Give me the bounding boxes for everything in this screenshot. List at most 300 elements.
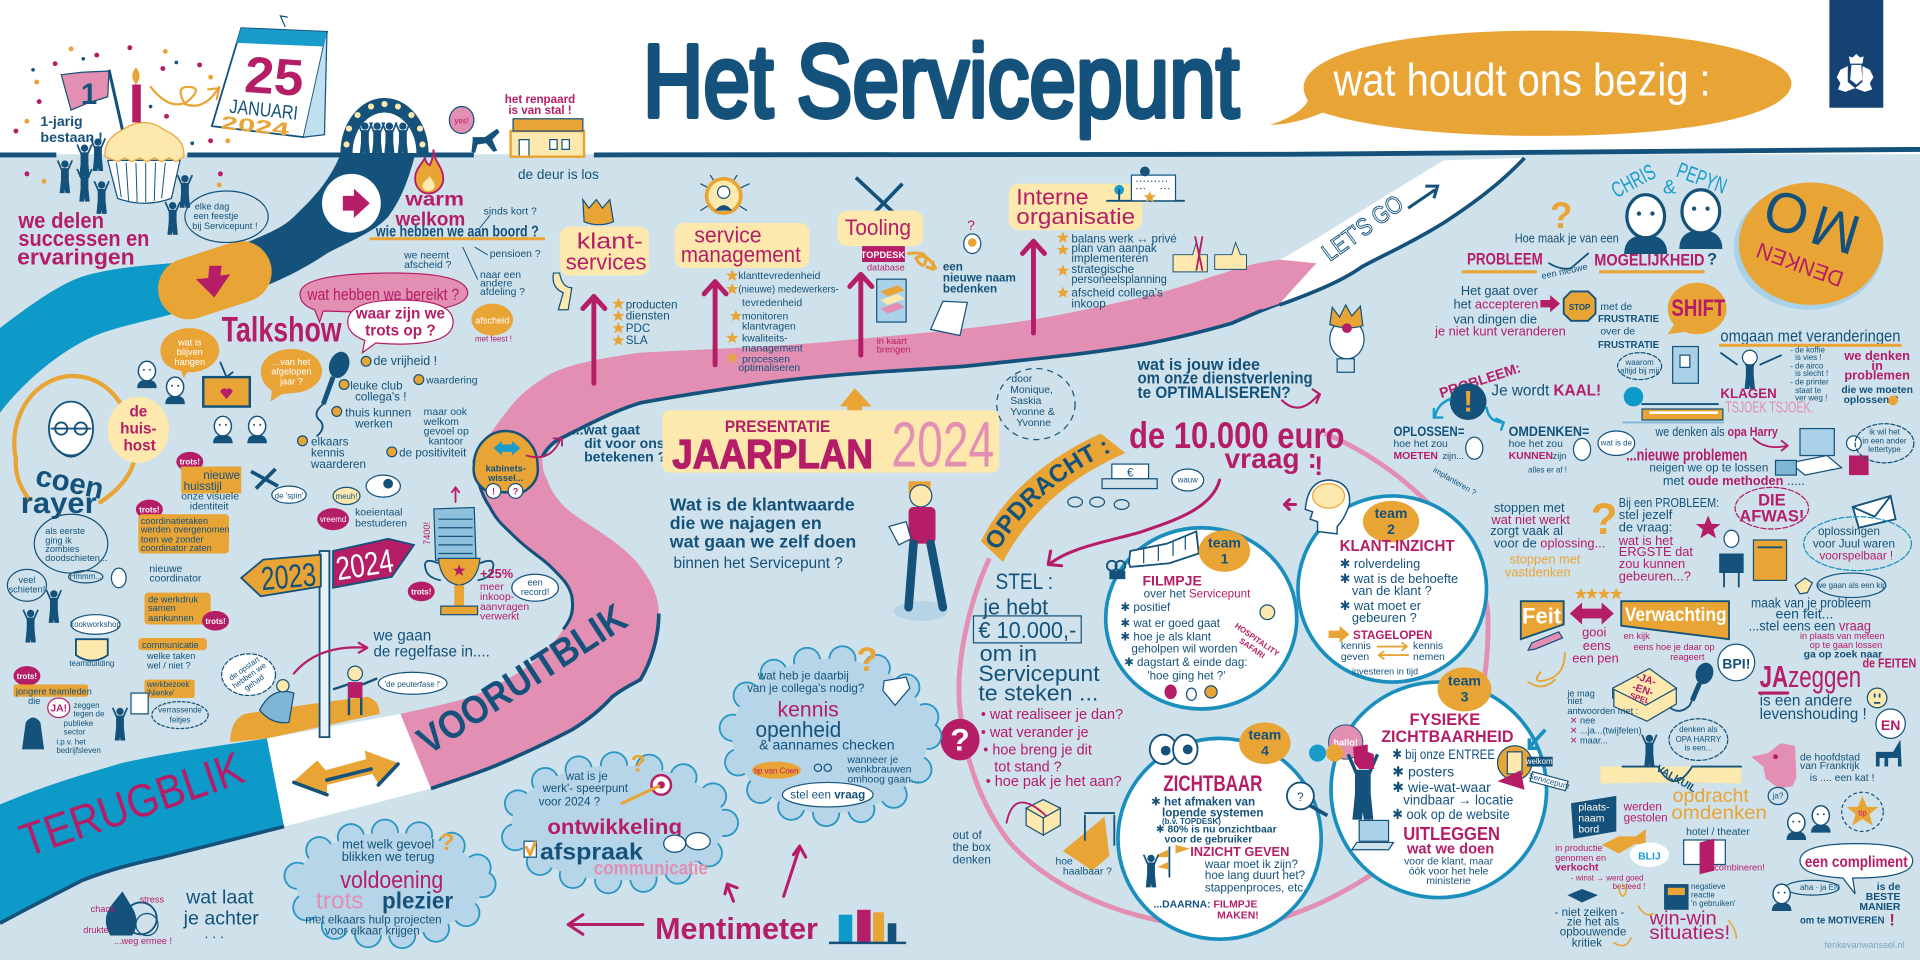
section: trots notes	[7, 500, 230, 755]
section: trots notes: schieten!	[9, 585, 45, 595]
list: SLA	[626, 334, 648, 347]
section: stoppen met wat niet werkt	[1490, 487, 1911, 598]
panel: team 3: óók voor het hele	[1409, 866, 1489, 877]
label: in kaart brengen: brengen	[877, 345, 910, 355]
section: trots notes: teambuilding	[69, 659, 114, 668]
section: omgaan met veranderingen: oplossen ?	[1844, 395, 1898, 406]
panel: team 1: Servicepunt	[1189, 588, 1251, 601]
tag: team 1	[1199, 530, 1250, 572]
panel: team 1: ✱ wat er goed gaat	[1120, 617, 1221, 630]
section: probleem mogelijkheid: accepteren	[1475, 297, 1538, 312]
list: diensten	[626, 310, 670, 323]
arrow: swirl	[909, 253, 936, 269]
section: feit verwachting: nee	[1580, 716, 1595, 726]
list: balans werk ↔ privé	[1071, 232, 1177, 245]
bubble: stel een vraag	[782, 782, 873, 807]
speech bubble: wat houdt ons bezig	[1270, 31, 1791, 136]
dashed circle: door Monique: Monique,	[1010, 385, 1053, 396]
panel: team 1: ✱ hoe je als klant	[1120, 630, 1212, 643]
list: wat ging goed: thuis kunnen	[345, 406, 411, 419]
panel: team 4: MAKEN!	[1217, 910, 1259, 921]
icon: computer	[1776, 429, 1869, 475]
bubble: een compliment: een compliment	[1805, 854, 1908, 871]
icon: question circle	[940, 719, 980, 760]
section: probleem kaal: Je wordt KAAL!	[1491, 383, 1601, 400]
section: chris and pepyn: PEPYN	[1673, 158, 1730, 199]
portrait: coen rayer: coen	[33, 459, 107, 506]
panel: team 4	[1118, 722, 1374, 939]
icon: calendar: 2024	[220, 112, 292, 140]
icon: paper dolls	[1173, 236, 1247, 272]
tag: team 2: team	[1375, 505, 1407, 521]
icon: knot of chaos	[83, 891, 172, 946]
label: interne organisatie	[1009, 184, 1142, 230]
bubble: peuterfase: 'de peuterfase !'	[385, 680, 441, 689]
section: plaatsnaambord: gestolen	[1624, 812, 1668, 825]
tag: team 1: team	[1208, 534, 1241, 550]
arrow: mentimeter left	[568, 915, 643, 934]
band: let's go: LET'S GO	[1317, 190, 1409, 267]
section: omgaan met veranderingen: problemen	[1844, 368, 1910, 383]
icon: crown	[583, 200, 613, 225]
icon: trophy and paper stack: 7400!	[422, 522, 432, 545]
section: probleem kaal: zijn	[1553, 451, 1566, 461]
section: trots notes: i.p.v. het	[56, 737, 87, 746]
section: maak van je probleem een feit: een feit...	[1776, 605, 1833, 621]
panel: team 1: geholpen wil worden	[1131, 643, 1237, 656]
section: plaatsnaambord: win-win	[1648, 907, 1717, 929]
heading: we delen successen en ervaringen: successen en	[18, 226, 149, 251]
panel: team 4: ✱ het afmaken van	[1151, 796, 1255, 809]
panel: team 4: ZICHTBAAR	[1163, 771, 1263, 796]
section: probleem kaal: hoe het zou	[1509, 439, 1563, 450]
label: wat gaat dit voor ons betekenen: betekenen ?	[584, 449, 666, 465]
section: trots notes: toen we zonder	[141, 534, 204, 544]
icon: cupcake	[105, 67, 184, 203]
cloud: opa harry: is een...	[1684, 744, 1712, 753]
icon: envelope	[1853, 496, 1896, 528]
section: maak van je probleem een feit: in plaats van meteen	[1800, 631, 1885, 641]
speech: elke dag een feestje	[185, 191, 268, 242]
icon: complaining person	[1720, 350, 1782, 388]
jaarplan presentation banner	[662, 388, 999, 481]
bubble: EN	[1876, 709, 1905, 738]
header divider line	[0, 149, 1920, 155]
bubble: blij	[1630, 842, 1669, 867]
bubble: BPI: BPI!	[1722, 656, 1750, 672]
section: trots notes: verrassende	[158, 706, 202, 715]
icon: knot of chaos: ...weg ermee !	[114, 936, 172, 946]
section: maak van je probleem een feit: is .... een kat !	[1810, 773, 1874, 784]
label: klant-services: klant-	[577, 229, 643, 254]
icon: road to finish	[1063, 813, 1114, 871]
section: maak van je probleem een feit: levenshouding !	[1760, 706, 1867, 723]
cloud: kennis openheid: & aannames checken	[759, 736, 895, 752]
bubble: kip zonder kop	[1795, 573, 1887, 598]
big pink arc	[959, 433, 1488, 927]
section: probleem mogelijkheid: een nieuwe	[1540, 262, 1588, 281]
logo: Rijksoverheid	[1829, 0, 1883, 108]
section: warm welkom	[371, 149, 544, 344]
section: trots notes: sector	[64, 728, 86, 737]
panel: team 3: UITLEGGEN	[1403, 823, 1500, 844]
label: out of the box denken: out of	[953, 829, 983, 842]
icon: toddler	[333, 666, 377, 715]
section: probleem kaal: zijn...	[1442, 451, 1464, 461]
label: nieuwe naam bedenken: een	[943, 261, 963, 274]
bubble: waar zijn we trots op: trots op ?	[365, 323, 436, 340]
bubble: kabinetswissel: wissel...	[487, 473, 523, 483]
label: meer inkoop aanvragen	[408, 566, 558, 623]
icon: house with open door	[511, 119, 584, 157]
section: plaatsnaambord	[1554, 796, 1765, 950]
section: om denken: M	[1804, 193, 1867, 267]
section: stoppen met wat niet werkt: stoppen met	[1510, 551, 1581, 566]
label: out of the box denken: the box	[953, 841, 991, 854]
river: terugblik to warm welkom (upper band)	[0, 154, 415, 413]
section: plaatsnaambord: werden	[1623, 801, 1662, 814]
icon: knot of chaos: chaos	[91, 904, 116, 914]
label: meer inkoop aanvragen: record!	[521, 587, 549, 597]
sign: 2023: 2023	[260, 557, 318, 598]
section: plaatsnaambord: zie het als	[1567, 916, 1619, 929]
section: talkshow	[137, 273, 478, 471]
section: lightbulb idea: om onze dienstverlening	[1138, 368, 1313, 387]
section: chris and pepyn: CHRIS	[1607, 159, 1660, 203]
list: monitoren	[742, 312, 788, 323]
section: stoppen met wat niet werkt: gebeuren...?	[1619, 568, 1691, 583]
panel: team 2: kennis	[1341, 641, 1371, 652]
badge: afscheid met feest	[471, 304, 513, 344]
section: trots notes: die	[28, 696, 40, 706]
cloud: voldoening: trots	[316, 888, 364, 915]
cloud: voldoening: blikken we terug	[342, 849, 435, 864]
list: strategische	[1071, 263, 1134, 276]
icon: calendar: JANUARI	[228, 96, 299, 125]
list: questions: • wat realiseer je dan?	[981, 707, 1123, 723]
section: probleem kaal	[1393, 359, 1635, 498]
cloud: voldoening: met elkaars hulp projecten	[305, 913, 442, 926]
text: stel: je hebt	[982, 595, 1048, 620]
cloud: die afwas: DIE	[1758, 491, 1786, 510]
section: probleem mogelijkheid: ?	[1707, 249, 1717, 268]
label: meer inkoop aanvragen: een	[527, 577, 543, 587]
section: huisstijl and cow: onze visuele	[181, 492, 239, 503]
panel: team 2: ✱ wat moet er	[1340, 598, 1422, 613]
icon: knot of chaos: stress	[140, 894, 164, 904]
section: huisstijl and cow: bestuderen	[355, 519, 407, 530]
title: Het Servicepunt	[643, 23, 1239, 138]
icon: signpost person	[1144, 845, 1190, 887]
heading: we delen successen en ervaringen: ervaringen	[17, 244, 135, 269]
icon: hospitality safari	[1228, 605, 1281, 667]
bubble: EN: EN	[1881, 717, 1900, 733]
section: probleem mogelijkheid: van dingen die	[1453, 311, 1537, 326]
icon: layered papers	[877, 279, 906, 322]
cloud: kennis openheid: wenkbrauwen	[846, 765, 912, 776]
label: tooling: Tooling	[845, 215, 911, 240]
section: plaatsnaambord: kritiek	[1572, 937, 1602, 950]
white circle with right arrow	[322, 174, 381, 233]
cloud: ontwikkeling: ontwikkeling	[547, 816, 682, 839]
label: nieuwe naam bedenken: bedenken	[943, 283, 997, 296]
section: stoppen met wat niet werkt: zorgt vaak al	[1490, 523, 1563, 538]
panel: team 3: ✱ posters	[1392, 763, 1454, 779]
section: huisstijl and cow: identiteit	[190, 501, 229, 512]
panel: team 3: wat we doen	[1406, 841, 1494, 857]
icon: hand	[553, 273, 572, 310]
section: om denken: O	[1756, 176, 1817, 250]
section: probleem kaal: PROBLEEM:	[1437, 359, 1523, 401]
icon: france map	[1751, 743, 1796, 789]
panel: team 4: (b.v. TOPDESK)	[1162, 817, 1221, 826]
column: klantservices	[553, 200, 677, 383]
list: implementeren	[1071, 252, 1148, 265]
section: feit verwachting: reageert	[1670, 652, 1705, 662]
section: probleem kaal: hoe het zou	[1393, 439, 1448, 450]
section: chris and pepyn: &	[1663, 176, 1676, 198]
cloud: ander lettertype	[1855, 424, 1914, 463]
tag: team 4: team	[1248, 727, 1281, 743]
section: trots notes: nieuwe	[149, 564, 183, 575]
section: plaatsnaambord: besteed !	[1613, 882, 1645, 891]
cloud: ontwikkeling: werk'- speerpunt	[541, 782, 629, 795]
section: trots notes: Hmmm...	[70, 572, 102, 581]
label: wat laat je achter: wat laat	[185, 887, 254, 909]
section: maak van je probleem een feit: is een andere	[1760, 692, 1852, 709]
tag: team 1: 1	[1221, 550, 1229, 566]
panel: team 3: vindbaar → locatie	[1403, 791, 1514, 807]
section: maak van je probleem een feit: op te gaan lossen	[1810, 640, 1882, 650]
list: wat ging goed: waarderen	[310, 458, 366, 471]
badge: afscheid met feest: afscheid	[475, 315, 509, 325]
bubble: tip van coen	[752, 762, 801, 779]
icon: stop sign: STOP	[1569, 303, 1591, 312]
label: in kaart brengen: in kaart	[877, 336, 907, 346]
section: trots notes: welke taken	[146, 651, 195, 661]
text: stel: Servicepunt	[978, 661, 1100, 686]
icon: lightbulb: ?	[967, 217, 975, 233]
list: wat ging goed: welkom	[423, 417, 459, 428]
section: omgaan met veranderingen: we denken als opa Harry	[1655, 424, 1779, 439]
section: trots notes: samen	[148, 603, 176, 613]
section: een compliment: MANIER	[1859, 902, 1901, 913]
label: service management: service	[694, 222, 762, 247]
cloud: waarom altijd bij mij	[1618, 353, 1662, 380]
panel: team 3: FYSIEKE	[1410, 710, 1480, 729]
panel: team 3: voor de klant, maar	[1404, 856, 1494, 867]
dashed circle: door Monique	[997, 369, 1075, 440]
panel: team 4: voor de gebruiker	[1164, 834, 1252, 845]
panel: team 4: hoe lang duurt het?	[1205, 869, 1306, 882]
section: trots notes: aankunnen	[148, 613, 194, 623]
list: wat ging goed: elkaars	[311, 436, 349, 449]
section: probleem kaal: MOETEN	[1393, 451, 1438, 462]
label: het renpaard is van stal: het renpaard	[505, 93, 575, 106]
icon: bulb with crown	[1330, 305, 1364, 372]
panel: team 2: van de klant ?	[1352, 583, 1432, 598]
section: omgaan met veranderingen: ...nieuwe problemen	[1626, 445, 1747, 464]
icon: target	[622, 775, 671, 803]
section: plaatsnaambord: combineren!	[1714, 863, 1765, 873]
cloud: oplossingen	[1804, 517, 1911, 571]
icon: star	[1696, 516, 1720, 538]
section: omgaan met veranderingen: staat te	[1795, 386, 1822, 395]
section: omgaan met veranderingen: KLAGEN	[1720, 385, 1777, 401]
section: stoppen met wat niet werkt: Bij een PROBLEEM:	[1619, 495, 1719, 510]
section: chris and pepyn: ?	[1550, 195, 1572, 236]
section: probleem mogelijkheid: het	[1453, 297, 1475, 312]
icon: microphone	[1670, 660, 1716, 711]
icon: compass person	[700, 175, 749, 213]
section: omgaan met veranderingen: die we moeten	[1841, 385, 1913, 396]
bubble: kabinetswissel: ?	[513, 487, 519, 497]
cloud: kennis openheid: van je collega's nodig?	[747, 682, 865, 695]
icon: stop sign	[1564, 291, 1596, 321]
label: interne organisatie: organisatie	[1016, 204, 1135, 229]
bubble: tip van coen: tip van Coen	[754, 766, 799, 775]
list: afscheid collega's	[1071, 286, 1163, 299]
bubble: wat is blijven hangen	[160, 328, 219, 378]
panel: team 4: FILMPJE	[1214, 899, 1257, 910]
heading: talkshow: Talkshow	[222, 310, 342, 350]
label: meer inkoop aanvragen: verwerkt	[480, 612, 519, 623]
icon: train	[1622, 387, 1724, 422]
label: wat gaat dit voor ons betekenen: ...wat gaat	[572, 422, 640, 438]
icon: heads with tip star: tip	[1858, 809, 1867, 818]
panel: team 4: INZICHT GEVEN	[1190, 844, 1289, 859]
section: omgaan met veranderingen: - de koffie	[1790, 346, 1826, 355]
section: probleem kaal: wat is de	[1600, 439, 1633, 448]
speech: elke dag een feestje: een feestje	[193, 211, 238, 221]
list: questions: • hoe pak je het aan?	[986, 774, 1122, 790]
section: chris and pepyn	[1550, 158, 1730, 254]
cloud: opa harry: OPA HARRY	[1676, 735, 1722, 744]
section: trots notes: werden overgenomen	[140, 525, 230, 535]
section: probleem mogelijkheid: PROBLEEM	[1467, 249, 1543, 268]
label: meer inkoop aanvragen: +25%	[480, 566, 514, 581]
section: omgaan met veranderingen: - de airco	[1790, 362, 1824, 371]
list: wat ging goed: gevoel op	[424, 427, 469, 438]
label: meer inkoop aanvragen: meer	[480, 582, 504, 593]
panel: team 4: lopende systemen	[1162, 807, 1263, 820]
list: wat ging goed: collega's !	[355, 390, 406, 403]
section: feit verwachting: eens	[1583, 638, 1611, 653]
section: lightbulb idea: wat is jouw idee	[1137, 355, 1260, 374]
section: maak van je probleem een feit: ...stel eens een vraag	[1749, 618, 1874, 634]
sign: 2023	[241, 555, 321, 598]
icon: baby	[260, 680, 294, 723]
bubble: van het afgelopen jaar	[261, 349, 322, 402]
label: interne organisatie: Interne	[1016, 184, 1089, 209]
section: feit verwachting: opdracht	[1673, 785, 1749, 807]
label: hoe haalbaar: haalbaar ?	[1063, 866, 1112, 877]
column: interne organisatie	[1009, 167, 1247, 333]
cloud: ontwikkeling: afspraak	[540, 839, 643, 865]
panel: team 2: ✱ rolverdeling	[1340, 556, 1420, 571]
section: omgaan met veranderingen: we denken	[1843, 348, 1910, 363]
panel: team 3: ✱ ook op de website	[1392, 806, 1510, 822]
icon: money	[1068, 464, 1204, 509]
panel: team 4: stappenproces, etc.	[1205, 881, 1306, 894]
cloud: waarom altijd bij mij: waarom	[1624, 358, 1654, 367]
column: tooling	[838, 178, 1016, 355]
dashed circle: door Monique: door	[1011, 374, 1033, 385]
section: feit verwachting: ✕	[1570, 735, 1580, 745]
panel: team 1: ✱ dagstart & einde dag:	[1124, 656, 1248, 669]
section: probleem mogelijkheid: Hoe maak je van een	[1515, 230, 1619, 245]
panel: team 1	[1106, 528, 1297, 709]
icon: book	[1664, 884, 1689, 910]
heading: de 10.000 euro vraag: de 10.000 euro	[1129, 415, 1344, 456]
bubble: waar zijn we trots op	[348, 300, 453, 353]
icon: pencil	[1528, 632, 1565, 686]
cloud: ontwikkeling	[512, 750, 725, 880]
panel: team 3: ✱ wie-wat-waar	[1392, 779, 1491, 795]
section: omgaan met veranderingen: in	[1871, 358, 1883, 373]
cloud: de opstart	[222, 653, 276, 698]
arrow up	[1022, 241, 1044, 333]
label: de deur is los: de deur is los	[518, 166, 599, 182]
section: lightbulb idea	[1137, 305, 1364, 408]
icon: welcome arch	[340, 98, 429, 154]
jaarplan presentation banner: JAARPLAN	[672, 431, 873, 477]
list	[612, 298, 677, 347]
list: processen	[742, 354, 790, 365]
icon: building	[1107, 167, 1184, 202]
section: stoppen met wat niet werkt: oplossing...	[1540, 535, 1605, 550]
notes: sinds kort ?	[484, 206, 537, 217]
section: trots notes: jongere teamleden	[15, 686, 92, 696]
notes: afscheid ?	[404, 260, 452, 271]
heading: ja zeggen: JAzeggen	[1760, 660, 1861, 694]
section: huisstijl and cow	[176, 452, 407, 530]
section: trots notes: zeggen	[73, 701, 100, 710]
section: een compliment: !	[1889, 911, 1895, 930]
cloud: ontwikkeling: communicatie	[594, 857, 708, 879]
diagram: valkuil: VALKUIL	[1654, 764, 1698, 795]
band: terugblik	[0, 738, 284, 923]
section: om denken	[1734, 176, 1883, 310]
section: probleem mogelijkheid	[1434, 230, 1727, 351]
cloud: kennis openheid: omhoog gaan...	[847, 774, 920, 785]
icon: hello bubble	[1329, 725, 1363, 759]
cloud: voldoening	[296, 829, 482, 937]
bubble: wat hebben we bereikt	[300, 273, 468, 322]
section: omgaan met veranderingen	[1618, 327, 1914, 488]
tag: team 2: 2	[1387, 521, 1395, 537]
label: wat gaat dit voor ons betekenen: dit voor ons	[584, 435, 665, 451]
section: plaatsnaambord: hotel / theater	[1686, 827, 1750, 838]
icon: raised eyebrows	[814, 764, 831, 771]
list: wat ging goed: waardering	[425, 375, 478, 386]
heading: we delen successen en ervaringen: we delen	[17, 208, 104, 233]
text: stel: te steken ...	[978, 680, 1098, 705]
section: een compliment: aha · ja EN	[1800, 883, 1840, 892]
panel: team 1: over het	[1144, 588, 1189, 601]
section: probleem mogelijkheid: je niet kunt veranderen	[1434, 324, 1566, 339]
panel: team 1: FILMPJE	[1142, 572, 1202, 588]
section: huisstijl and cow: de 'spin'	[275, 491, 304, 500]
bar chart: mentimeter	[829, 910, 906, 943]
icon: checkbox	[524, 841, 536, 857]
talkshow guests	[137, 361, 267, 443]
cloud: de opstart: de opstart	[227, 654, 262, 682]
section: trots notes: 'Nienke'	[147, 689, 175, 698]
icon: heads with tip star	[1768, 787, 1883, 840]
icon: bed and door	[1684, 839, 1725, 874]
cloud: ander lettertype: lettertype	[1868, 445, 1901, 454]
